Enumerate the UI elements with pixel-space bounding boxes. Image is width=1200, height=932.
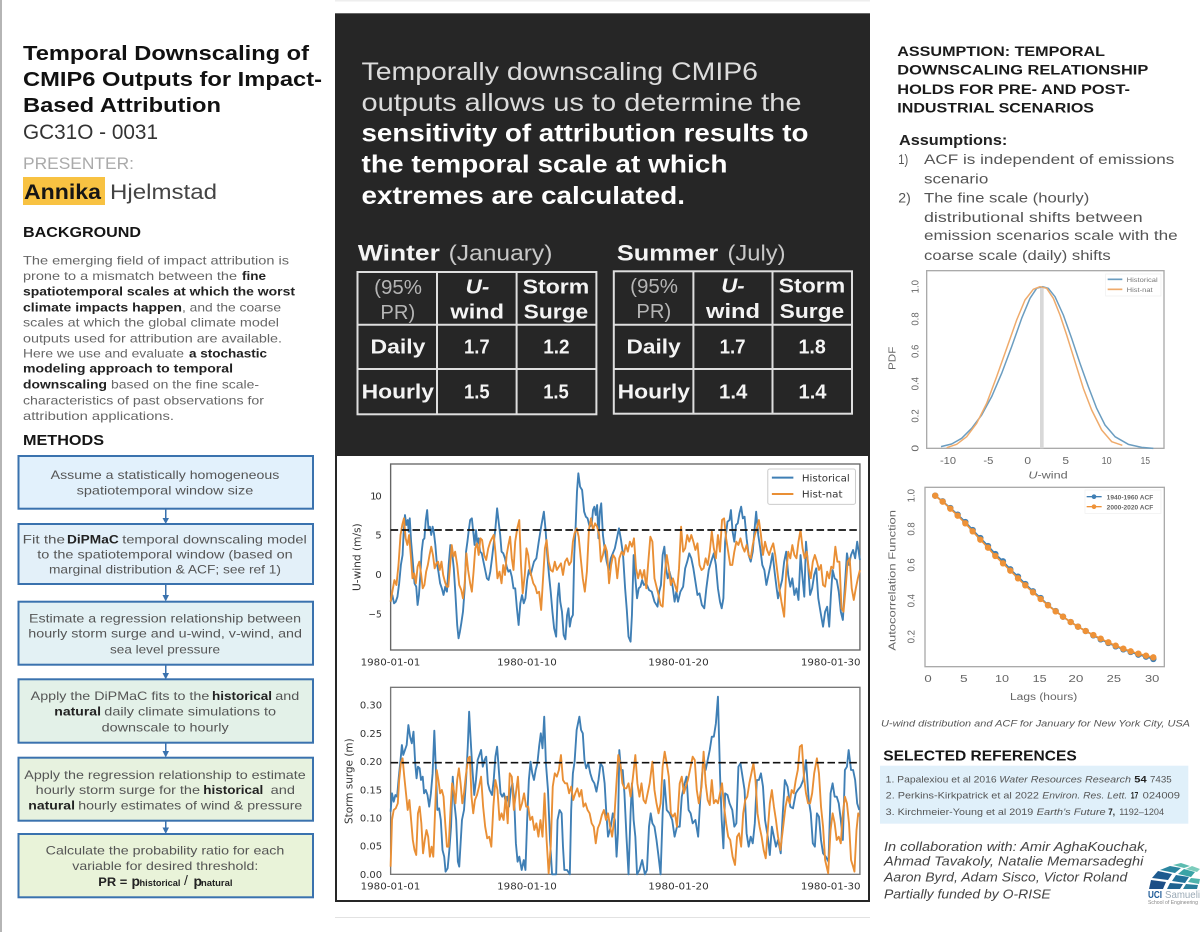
step 2 <box>18 524 313 584</box>
collaborators text: Aaron Byrd, Adam Sisco, Victor Roland <box>883 870 1128 885</box>
axis labels: 15 <box>1033 674 1047 685</box>
assumptions list <box>898 133 1178 263</box>
y axis labels: 5 <box>375 531 382 542</box>
2000-2020 ACF series <box>935 496 1153 657</box>
legend: Hist-nat <box>1127 287 1153 294</box>
step 1 <box>18 456 313 509</box>
background text: modeling approach to temporal <box>23 362 233 376</box>
table: winter: 1.5 <box>464 381 490 403</box>
background text: prone to a mismatch between the <box>23 269 237 283</box>
panel: key message and tables <box>335 13 870 455</box>
x axis labels: 1980-01-30 <box>801 658 861 669</box>
table: summer: 1.8 <box>798 336 826 358</box>
references list: 3. Kirchmeier-Young et al 2019 <box>886 807 1033 818</box>
step 6: variable for desired threshold: <box>72 859 258 873</box>
heading: assumption: ASSUMPTION: TEMPORAL <box>897 44 1105 59</box>
line chart: U-wind PDF <box>888 271 1164 481</box>
step 6 <box>18 834 313 897</box>
table: winter: 1.2 <box>543 336 570 358</box>
Hist-nat curve <box>947 287 1122 448</box>
axis labels: 5 <box>1062 456 1070 467</box>
references list <box>880 766 1188 824</box>
x axis labels: 1980-01-01 <box>361 658 420 669</box>
axis labels: -5 <box>983 456 994 467</box>
table: summer <box>614 271 852 414</box>
background text: Here we use and evaluate <box>23 346 184 360</box>
axis labels: 0.4 <box>910 377 921 390</box>
x axis labels: 1980-01-10 <box>497 881 557 892</box>
axis labels <box>888 489 1160 703</box>
references list: 1192–1204 <box>1119 807 1164 818</box>
axis labels: 0 <box>1024 456 1032 467</box>
y axis labels: 0 <box>375 570 382 581</box>
assumptions list: scenario <box>924 171 988 186</box>
axis labels: 20 <box>1068 674 1084 685</box>
Historical series <box>391 697 859 874</box>
axis labels: 5 <box>960 674 968 685</box>
table: summer: Hourly <box>618 381 691 403</box>
Historical series <box>391 473 860 642</box>
background text: spatiotemporal scales at which the worst <box>23 284 295 298</box>
axis labels: 0.2 <box>910 409 921 423</box>
table: summer: Storm <box>779 276 845 298</box>
Hist-nat series <box>391 518 860 617</box>
background text <box>23 254 295 423</box>
logo: UCI Samueli: UCI <box>1148 889 1162 901</box>
axis labels: 15 <box>1141 456 1150 467</box>
figure caption: U-wind distribution and ACF for January for New York City, USA <box>881 719 1190 730</box>
1940-1960 ACF series <box>935 496 1153 659</box>
y axis labels: 0.20 <box>360 757 382 768</box>
step 4: historical <box>212 689 272 703</box>
collaborators text: In collaboration with: Amir AghaKouchak, <box>884 839 1148 854</box>
arrow: step 2 to 3 <box>162 584 169 602</box>
references list: 2. Perkins-Kirkpatrick et al 2022 <box>886 790 1039 801</box>
table: winter: 1.7 <box>464 336 490 358</box>
table: winter: Surge <box>524 301 588 323</box>
axis labels: 30 <box>1145 674 1160 685</box>
x axis labels: 1980-01-20 <box>648 658 709 669</box>
table: winter: 1.5 <box>543 381 569 403</box>
references list: Environ. Res. Lett. <box>1042 790 1127 801</box>
table heading: winter: (January) <box>449 241 552 266</box>
y axis labels <box>353 491 382 621</box>
assumptions list: 1) <box>898 152 908 167</box>
step 3: Estimate a regression relationship between <box>29 611 301 625</box>
logo: UCI Samueli <box>1148 863 1200 906</box>
step 6: p <box>194 873 202 889</box>
axis labels: 0.8 <box>906 522 917 536</box>
references list: 1. Papalexiou et al 2016 <box>886 774 997 785</box>
step 2: marginal distribution & ACF; see ref 1) <box>49 562 281 576</box>
headline: extremes are calculated. <box>362 182 685 210</box>
references list: 7435 <box>1150 774 1172 785</box>
background text: attribution applications. <box>23 409 174 423</box>
legend: 2000-2020 ACF <box>1107 504 1153 511</box>
axis labels: Autocorrelation Function <box>888 510 899 651</box>
collaborators text: Ahmad Tavakoly, Natalie Memarsadeghi <box>883 854 1145 869</box>
x axis labels: 1980-01-20 <box>648 881 709 892</box>
y axis labels: −5 <box>368 610 382 621</box>
arrow: step 5 to 6 <box>162 820 169 834</box>
headline: Temporally downscaling CMIP6 <box>362 58 758 86</box>
collaborators text <box>883 839 1148 901</box>
axis labels: Lags (hours) <box>1010 692 1077 703</box>
arrow: step 4 to 5 <box>162 742 169 758</box>
step 5: hourly storm surge for the <box>36 783 200 797</box>
axis labels: 0 <box>910 444 921 452</box>
table heading: winter: Winter <box>358 241 440 266</box>
table: summer: 1.4 <box>719 381 748 403</box>
step 3: sea level pressure <box>110 642 220 656</box>
step 4: natural <box>54 705 101 719</box>
title: Based Attribution <box>23 94 221 117</box>
table: winter: Hourly <box>362 381 435 403</box>
axis labels: -10 <box>940 456 956 467</box>
y axis labels <box>345 701 382 881</box>
poster number: GC31O - 0031 <box>23 121 158 144</box>
references list: 17 <box>1131 790 1138 801</box>
background text: downscaling <box>23 378 107 392</box>
step 4: daily climate simulations to <box>104 705 276 719</box>
step 3: hourly storm surge and u-wind, v-wind, and <box>28 627 302 641</box>
legend: Historical <box>1127 277 1158 284</box>
table: winter: wind <box>449 301 504 323</box>
table: summer: 1.7 <box>720 336 746 358</box>
table: summer: 1.4 <box>798 381 827 403</box>
step 4: and <box>275 689 299 703</box>
line chart: U-wind time series <box>353 464 861 669</box>
table heading: summer: Summer <box>617 241 719 266</box>
assumptions list: coarse scale (daily) shifts <box>924 248 1111 263</box>
axis labels: 25 <box>1107 674 1122 685</box>
heading: assumption <box>897 44 1148 116</box>
heading: assumption: INDUSTRIAL SCENARIOS <box>897 101 1094 116</box>
x axis labels <box>361 658 861 669</box>
background text: a stochastic <box>189 346 267 360</box>
table: summer: (95% <box>630 276 678 298</box>
step 6: Calculate the probability ratio for each <box>46 844 284 858</box>
step 5: historical <box>203 783 263 797</box>
y axis labels: 0.25 <box>360 729 382 740</box>
y axis labels: 0.10 <box>360 813 382 824</box>
presenter name <box>23 177 217 205</box>
y axis labels: Storm surge (m) <box>345 738 356 824</box>
step 1: Assume a statistically homogeneous <box>51 468 279 482</box>
legend: Hist-nat <box>802 490 843 501</box>
step 6: natural <box>201 878 232 888</box>
axis labels: 1.0 <box>906 489 917 502</box>
step 5: hourly estimates of wind & pressure <box>78 798 303 812</box>
table heading: summer <box>617 241 786 266</box>
collaborators text: Partially funded by O-RISE <box>884 886 1051 901</box>
heading: selected references: SELECTED REFERENCES <box>883 748 1077 765</box>
background text: , and the coarse <box>182 301 281 315</box>
table: winter <box>358 272 596 414</box>
y axis labels: 0.15 <box>360 785 382 796</box>
table: winter: (95% <box>374 277 422 299</box>
axis labels: 1.0 <box>910 280 921 293</box>
arrow: step 1 to 2 <box>162 508 169 524</box>
step 2: Fit the <box>23 532 65 546</box>
table heading: summer: (July) <box>728 241 786 266</box>
step 2: to the spatiotemporal window (based on <box>37 548 293 562</box>
legend <box>768 469 855 504</box>
axis labels: 10 <box>1102 456 1112 467</box>
arrow: step 3 to 4 <box>162 664 169 680</box>
heading: methods: METHODS <box>23 433 104 449</box>
assumptions list: Assumptions: <box>899 133 1007 149</box>
table: summer: PR) <box>636 301 671 323</box>
line chart: autocorrelation function <box>888 487 1164 703</box>
table: winter: PR) <box>380 302 415 324</box>
references list: 024009 <box>1143 790 1180 801</box>
line chart: storm surge time series <box>345 687 861 892</box>
step 3 <box>18 602 313 665</box>
legend <box>1106 274 1161 296</box>
title: CMIP6 Outputs for Impact- <box>23 68 322 91</box>
methods flowchart <box>18 456 313 897</box>
x axis labels: 1980-01-01 <box>361 881 420 892</box>
step 6: historical <box>140 878 180 888</box>
axis labels: 0.2 <box>906 630 917 643</box>
step 5: natural <box>28 798 75 812</box>
table: summer: U- <box>721 276 745 298</box>
assumptions list: The fine scale (hourly) <box>924 191 1089 206</box>
axis labels: 0.4 <box>906 594 917 607</box>
background text: outputs used for attribution are available. <box>23 331 282 345</box>
axis labels: 0.6 <box>906 558 917 572</box>
legend: 1940-1960 ACF <box>1107 494 1153 501</box>
table: winter: Storm <box>523 276 589 298</box>
step 5: Apply the regression relationship to estimate <box>24 768 306 782</box>
x axis labels: 1980-01-30 <box>801 881 861 892</box>
table: winter: Daily <box>370 336 426 358</box>
step 4: Apply the DiPMaC fits to the <box>31 689 210 703</box>
assumptions list: emission scenarios scale with the <box>924 228 1178 243</box>
heading: assumption: HOLDS FOR PRE- AND POST- <box>897 82 1130 97</box>
table heading: winter <box>358 241 552 266</box>
axis labels: PDF <box>888 347 899 370</box>
step 6: p <box>132 873 140 889</box>
step 1: spatiotemporal window size <box>77 484 254 498</box>
background text: fine <box>242 269 266 283</box>
step 5 <box>18 758 313 821</box>
background text: based on the fine scale- <box>111 378 259 392</box>
assumptions list: ACF is independent of emissions <box>924 152 1175 167</box>
presenter name: Hjelmstad <box>110 181 217 204</box>
assumptions list: 2) <box>898 191 911 206</box>
x axis labels <box>361 881 861 892</box>
Historical curve <box>941 287 1153 448</box>
references list: 7, <box>1108 807 1115 818</box>
table: summer: Daily <box>626 336 682 358</box>
heading: background: BACKGROUND <box>23 225 141 241</box>
x axis labels: 1980-01-10 <box>497 658 557 669</box>
step 4: downscale to hourly <box>102 720 229 734</box>
title: Temporal Downscaling of <box>23 42 309 65</box>
legend <box>1085 490 1161 513</box>
step 6: / <box>184 872 188 888</box>
background text: scales at which the global climate model <box>23 316 279 330</box>
y axis labels: 0.05 <box>360 842 382 853</box>
presenter label: PRESENTER: <box>23 154 134 173</box>
table: winter: U- <box>466 276 490 298</box>
y axis labels: U-wind (m/s) <box>353 523 364 591</box>
y axis labels: 0.30 <box>360 701 382 712</box>
step 2: temporal downscaling model <box>122 532 307 546</box>
axis labels <box>888 280 1150 481</box>
step 4 <box>18 679 313 743</box>
background text: The emerging field of impact attribution is <box>23 254 289 268</box>
axis labels: 10 <box>995 674 1010 685</box>
background text: characteristics of past observations for <box>23 394 264 408</box>
background text: climate impacts happen <box>23 301 182 315</box>
headline: sensitivity of attribution results to <box>362 120 808 148</box>
panel: time series charts <box>336 455 869 901</box>
assumptions list: distributional shifts between <box>924 210 1143 225</box>
axis labels: U-wind <box>1028 470 1068 481</box>
Hist-nat series <box>391 745 859 873</box>
heading: assumption: DOWNSCALING RELATIONSHIP <box>897 63 1148 78</box>
references list: 54 <box>1134 774 1147 785</box>
axis labels: 0 <box>924 674 932 685</box>
table: summer: Surge <box>780 301 844 323</box>
presenter name: Annika <box>24 181 101 204</box>
references list: Earth's Future <box>1037 807 1106 818</box>
step 6: PR = <box>98 875 127 889</box>
axis labels: 0.8 <box>910 312 921 326</box>
step 2: DiPMaC <box>67 532 119 546</box>
title <box>23 42 322 117</box>
headline <box>362 58 808 210</box>
table: summer: wind <box>705 301 760 323</box>
logo: UCI Samueli: School of Engineering <box>1148 900 1198 906</box>
references list: Water Resources Research <box>999 774 1131 785</box>
headline: the temporal scale at which <box>362 150 728 178</box>
step 5: and <box>271 783 295 797</box>
y axis labels: 0.00 <box>360 870 382 881</box>
axis labels: 0.6 <box>910 344 921 358</box>
legend: Historical <box>802 474 850 485</box>
y axis labels: 10 <box>370 491 382 502</box>
headline: outputs allows us to determine the <box>362 89 802 117</box>
